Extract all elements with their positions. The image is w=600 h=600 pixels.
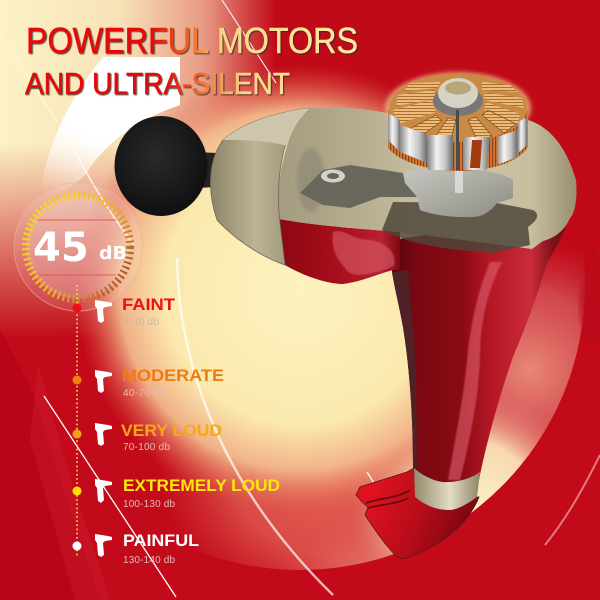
level: painful: PAINFUL	[123, 532, 199, 550]
pale reflection on body	[332, 231, 394, 275]
title: AND ULTRA-SILENT	[25, 66, 290, 101]
level: painful	[72, 532, 199, 566]
red body under head	[279, 219, 400, 284]
level: painful: 130-140 db	[123, 555, 175, 566]
connecting rod	[300, 165, 417, 208]
shaft	[455, 165, 463, 193]
noise gauge: dB	[99, 243, 127, 264]
red handle	[392, 212, 572, 490]
level: very loud: VERY LOUD	[121, 422, 222, 440]
level: faint: 0-40 db	[123, 317, 159, 328]
nose top light strip	[223, 108, 310, 146]
gold nose	[210, 108, 310, 265]
noise gauge	[14, 183, 142, 311]
title: POWERFUL MOTORS	[26, 20, 358, 61]
level: moderate	[72, 367, 224, 399]
level: very loud: 70-100 db	[123, 442, 170, 453]
gold rear head	[278, 107, 577, 249]
steel disc	[403, 168, 513, 217]
gauge reading: 45	[33, 225, 89, 271]
dark mount plate	[382, 202, 537, 253]
gold band and foot	[356, 468, 480, 559]
level: extremely loud	[72, 477, 280, 510]
level: moderate: 40-70 db	[123, 388, 165, 399]
level: very loud	[72, 422, 222, 453]
handle highlight	[448, 262, 502, 480]
handle side seam	[392, 270, 417, 467]
noise level scale	[72, 285, 280, 566]
level: extremely loud: 100-130 db	[123, 499, 175, 510]
level: extremely loud: EXTREMELY LOUD	[123, 477, 280, 495]
title	[25, 20, 358, 101]
level: faint	[72, 296, 175, 328]
ghosted inner cavity	[297, 148, 325, 212]
massage ball head	[114, 116, 216, 216]
level: moderate: MODERATE	[122, 367, 224, 385]
level: faint: FAINT	[122, 296, 175, 314]
stator motor	[385, 72, 531, 171]
massager illustration	[114, 72, 577, 559]
